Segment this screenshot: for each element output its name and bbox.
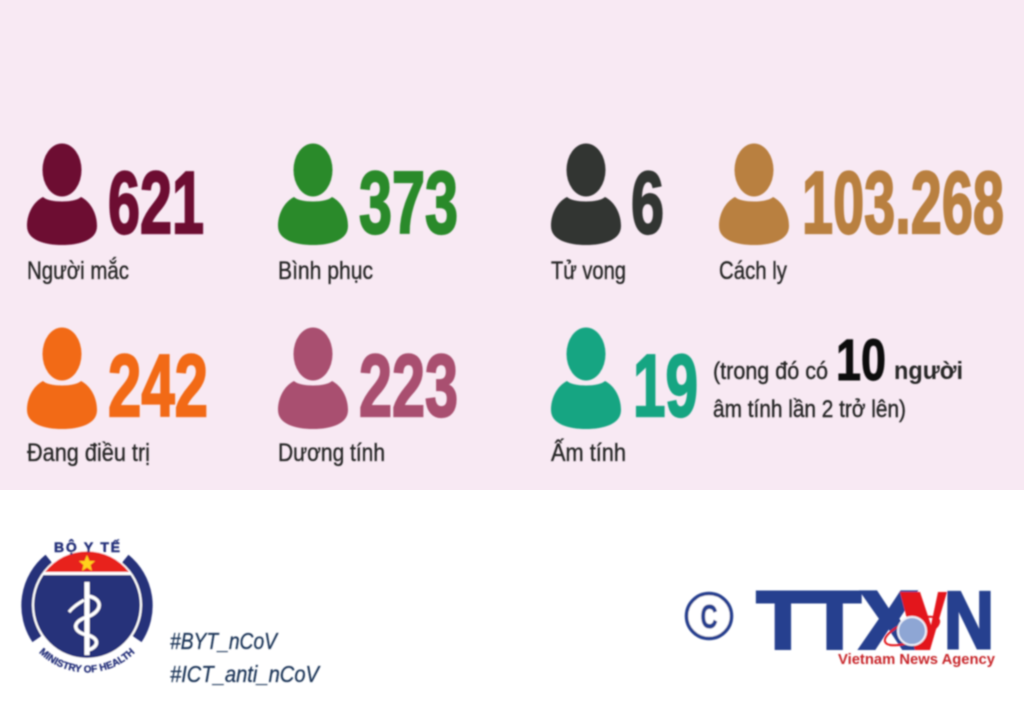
number: 19: 19 [633,336,698,435]
label: Cách ly: Cách ly [719,257,787,285]
label: Bình phục: Bình phục [278,257,373,285]
number: 6: 6 [631,153,664,252]
emblem red band [45,551,129,572]
number: 242: 242 [108,336,208,435]
note: negative twice [713,328,963,423]
stat: Bình phục [278,144,458,285]
icon: person dark grey [551,144,621,245]
logo: Ministry of Health [20,538,154,674]
icon: person mauve [278,328,348,429]
emblem navy disc [34,552,140,658]
emblem text top: BỘ Y TẾ [54,538,120,555]
number: 373: 373 [359,153,458,252]
note line 1 end: người [894,357,963,385]
note line 2: âm tính lần 2 trở lên) [713,396,906,423]
stat: Tử vong [551,144,664,285]
icon: person maroon [27,144,97,245]
hashtag 2: #ICT_anti_nCoV [170,661,321,687]
note line 1 start: (trong đó có [713,358,828,385]
stat: Đang điều trị [27,328,208,467]
logo tagline: Vietnam News Agency [838,651,996,668]
emblem band gap [43,572,131,575]
logo: TTXVN [757,576,996,668]
outer navy ring arc left [27,559,49,639]
icon: person orange [27,328,97,429]
logo letter N: N [944,576,994,666]
label: Tử vong: Tử vong [551,257,626,285]
emblem star [79,555,95,571]
icon: person green [278,144,348,245]
outer navy ring arc right [125,559,147,639]
hashtags [170,628,321,687]
icon: person teal [551,328,621,429]
number: 223: 223 [359,336,458,435]
stat: Dương tính [278,328,458,467]
label: Đang điều trị: Đang điều trị [27,439,150,467]
icon: person tan [719,144,789,245]
hashtag 1: #BYT_nCoV [170,628,279,654]
label: Người mắc: Người mắc [27,256,129,285]
emblem white ring [33,551,141,659]
label: Dương tính: Dương tính [278,439,385,467]
emblem text bottom: MINISTRY OF HEALTH [38,646,136,674]
panel: statistics background [0,0,1024,490]
number: 621: 621 [108,153,204,252]
emblem staff and serpent [69,582,99,655]
logo letters TTX: TTX [757,576,917,666]
note number: 10: 10 [836,328,886,393]
stat: Người mắc [27,144,204,285]
emblem arc path [31,643,143,672]
logo globe [898,617,926,645]
copyright symbol [686,594,732,638]
copyright ring [686,594,732,638]
stat: Âm tính [551,328,698,467]
stat: Cách ly [719,144,1004,285]
label: Âm tính: Ấm tính [551,438,626,467]
copyright letter: C [700,598,718,635]
logo red V [900,592,947,650]
logo orbit [881,611,943,651]
